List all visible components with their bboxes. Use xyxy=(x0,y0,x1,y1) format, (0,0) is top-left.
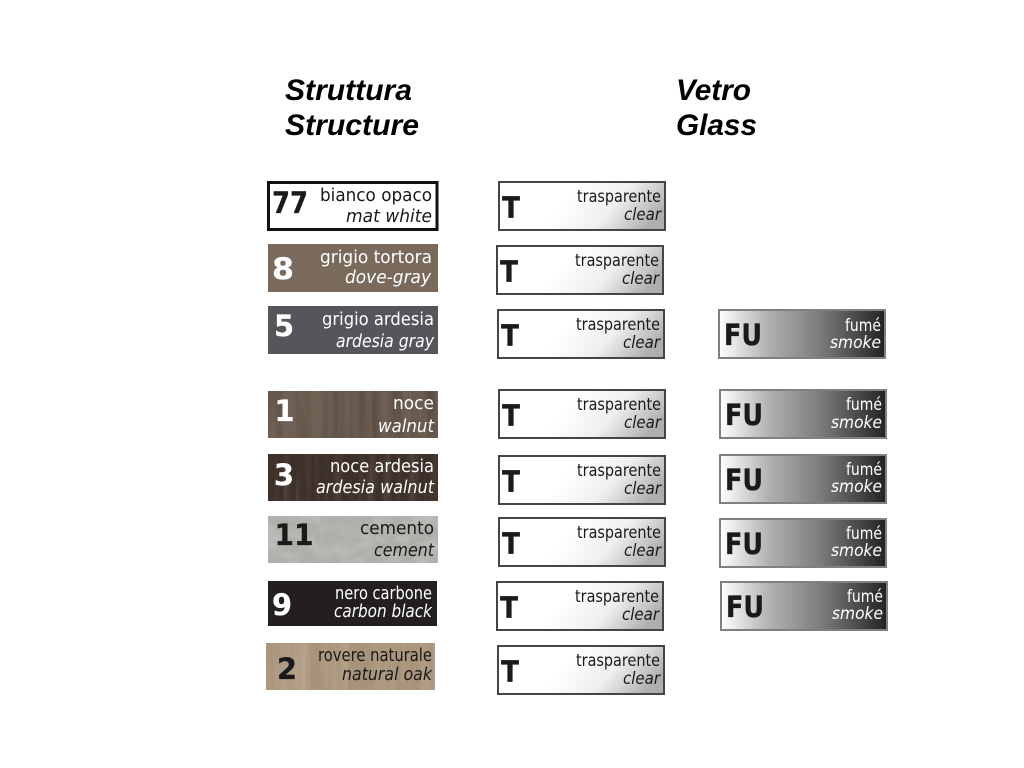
glass T row 7: trasparente xyxy=(575,587,659,606)
glass FU row 7: FU xyxy=(726,590,764,624)
glass T row 6 xyxy=(499,518,665,566)
swatch 8: dove-gray: grigio tortora xyxy=(320,247,432,268)
swatch 2: natural oak: natural oak xyxy=(342,664,433,685)
glass T row 6: T xyxy=(502,527,520,561)
swatch 5: ardesia gray xyxy=(268,306,438,354)
swatch 1: walnut xyxy=(268,391,438,438)
swatch 11: cement: cement xyxy=(374,540,435,561)
glass T row 2: clear xyxy=(622,269,660,288)
swatch 5: ardesia gray: 5 xyxy=(274,309,294,343)
glass T row 6: clear xyxy=(624,541,662,560)
glass T row 4: T xyxy=(502,399,520,433)
glass T row 1: trasparente xyxy=(577,187,661,206)
glass T row 3: clear xyxy=(623,333,661,352)
swatch 77: mat white: bianco opaco xyxy=(320,185,432,206)
glass T row 5: trasparente xyxy=(577,461,661,480)
glass T row 1: T xyxy=(502,191,520,225)
heading: Struttura / Structure: Struttura xyxy=(285,74,412,107)
glass T row 1: clear xyxy=(624,205,662,224)
swatch 8: dove-gray: dove-gray xyxy=(345,267,431,288)
glass FU row 6 xyxy=(720,519,886,567)
swatch 8: dove-gray: 8 xyxy=(272,252,294,286)
swatch 77: mat white: mat white xyxy=(346,206,432,227)
glass FU row 7: fumé xyxy=(847,587,883,606)
swatch 9: carbon black: carbon black xyxy=(334,601,433,622)
glass FU row 5 xyxy=(720,455,886,503)
swatch 11: cement xyxy=(268,516,438,563)
swatch 5: ardesia gray: grigio ardesia xyxy=(322,309,434,330)
heading: Vetro / Glass: Vetro xyxy=(676,74,751,107)
swatch 11: cement: cemento xyxy=(360,518,434,539)
glass FU row 3: smoke xyxy=(830,333,881,352)
glass T row 3 xyxy=(498,310,664,358)
heading: Struttura / Structure xyxy=(285,74,419,142)
glass FU row 3 xyxy=(719,310,885,358)
glass T row 7: T xyxy=(500,591,518,625)
glass T row 2: T xyxy=(500,255,518,289)
heading: Struttura / Structure: Structure xyxy=(285,109,419,142)
glass T row 8: trasparente xyxy=(576,651,660,670)
swatch 3: ardesia walnut: ardesia walnut xyxy=(316,477,435,498)
glass T row 8 xyxy=(498,646,664,694)
glass T row 2 xyxy=(497,246,663,294)
swatch 77: mat white: 77 xyxy=(272,186,308,220)
glass T row 8: clear xyxy=(623,669,661,688)
glass T row 3: trasparente xyxy=(576,315,660,334)
glass T row 7 xyxy=(497,582,663,630)
glass T row 4 xyxy=(499,390,665,438)
glass FU row 7 xyxy=(721,582,887,630)
swatch 1: walnut: walnut xyxy=(378,416,435,437)
swatch 5: ardesia gray: ardesia gray xyxy=(336,331,434,352)
swatch 3: ardesia walnut: noce ardesia xyxy=(330,456,434,477)
glass FU row 6: smoke xyxy=(831,541,882,560)
glass FU row 3: FU xyxy=(724,318,762,352)
glass T row 5: T xyxy=(502,465,520,499)
heading: Vetro / Glass: Glass xyxy=(676,109,757,142)
glass T row 5: clear xyxy=(624,479,662,498)
glass T row 8: T xyxy=(501,655,519,689)
glass FU row 3: fumé xyxy=(845,316,881,335)
glass T row 3: T xyxy=(501,319,519,353)
glass FU row 5: fumé xyxy=(846,460,882,479)
glass FU row 5: smoke xyxy=(831,477,882,496)
glass T row 4: clear xyxy=(624,413,662,432)
swatch 3: ardesia walnut xyxy=(268,454,438,501)
swatch 2: natural oak: rovere naturale xyxy=(318,645,432,666)
glass T row 5 xyxy=(499,456,665,504)
glass T row 6: trasparente xyxy=(577,523,661,542)
swatch 8: dove-gray xyxy=(268,244,438,292)
swatch 77: mat white xyxy=(268,182,437,230)
glass T row 1 xyxy=(499,182,665,230)
glass FU row 6: FU xyxy=(725,527,763,561)
glass T row 7: clear xyxy=(622,605,660,624)
swatch 9: carbon black: 9 xyxy=(272,588,292,622)
swatch 2: natural oak xyxy=(266,643,435,690)
glass FU row 5: FU xyxy=(725,463,763,497)
swatch 1: walnut: noce xyxy=(393,393,434,414)
swatch 9: carbon black: nero carbone xyxy=(335,583,432,604)
glass FU row 4 xyxy=(720,390,886,438)
swatch 3: ardesia walnut: 3 xyxy=(274,458,294,492)
glass FU row 4: FU xyxy=(725,398,763,432)
glass FU row 4: fumé xyxy=(846,395,882,414)
glass FU row 4: smoke xyxy=(831,413,882,432)
glass T row 4: trasparente xyxy=(577,395,661,414)
heading: Vetro / Glass xyxy=(676,74,757,142)
swatch 2: natural oak: 2 xyxy=(277,652,297,686)
swatch 9: carbon black xyxy=(268,581,437,626)
glass T row 2: trasparente xyxy=(575,251,659,270)
swatch 1: walnut: 1 xyxy=(274,394,294,428)
swatch 11: cement: 11 xyxy=(274,518,314,552)
glass FU row 7: smoke xyxy=(832,604,883,623)
glass FU row 6: fumé xyxy=(846,524,882,543)
